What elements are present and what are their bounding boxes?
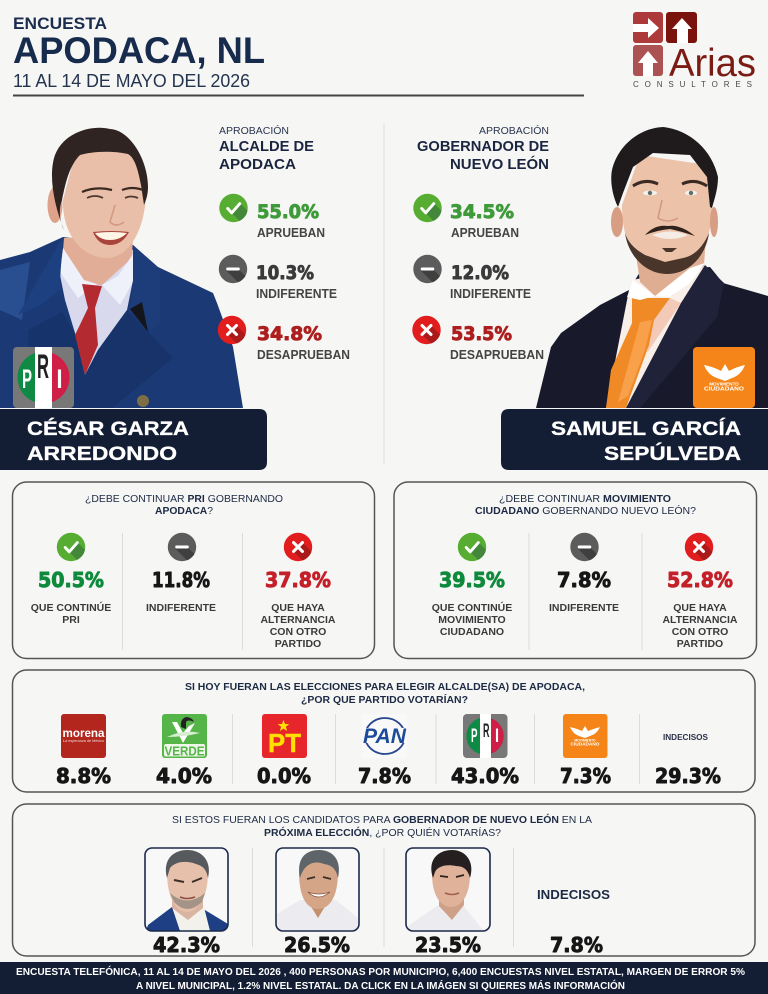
stat: indiferente alcalde xyxy=(219,255,337,301)
divider xyxy=(383,124,385,464)
option: alternancia MC: 52.8% xyxy=(667,568,733,592)
panel: intención de voto gobernador xyxy=(12,804,755,957)
heading: aprobación alcalde xyxy=(219,124,314,173)
stat: aprueban gobernador xyxy=(413,194,519,240)
name box: César Garza Arredondo: CÉSAR GARZA xyxy=(27,417,189,440)
indecisos: INDECISOS xyxy=(537,887,610,902)
party: indecisos: INDECISOS xyxy=(663,733,709,742)
party: PRI: I xyxy=(495,726,499,747)
heading: aprobación gobernador: NUEVO LEÓN xyxy=(450,155,549,173)
party: Morena: 8.8% xyxy=(56,764,111,788)
stat: desaprueban alcalde: DESAPRUEBAN xyxy=(257,348,350,362)
option: que continúe MC xyxy=(432,533,512,638)
panel: intención de voto gobernador: PRÓXIMA ELECCIÓN, ¿POR QUIÉN VOTARÍAS? xyxy=(264,826,501,839)
panel: continuar Movimiento Ciudadano: CIUDADANO GOBERNANDO NUEVO LEÓN? xyxy=(475,504,696,517)
option: alternancia PRI: PARTIDO xyxy=(275,638,321,650)
name box: César Garza Arredondo xyxy=(0,409,267,470)
name box: César Garza Arredondo: ARREDONDO xyxy=(27,443,177,465)
question: alcaldía: SI HOY FUERAN LAS ELECCIONES PARA ELEGIR ALCALDE(SA) DE APODACA, xyxy=(185,681,585,693)
stat: aprueban gobernador: APRUEBAN xyxy=(451,226,519,240)
stat: indiferente alcalde: INDIFERENTE xyxy=(256,287,337,301)
party: PT xyxy=(257,714,311,788)
stat: indiferente gobernador xyxy=(413,255,531,301)
party: Movimiento Ciudadano: 7.3% xyxy=(560,764,611,788)
option: alternancia MC: PARTIDO xyxy=(677,638,723,650)
party: Movimiento Ciudadano: MOVIMIENTO xyxy=(574,738,596,742)
heading: aprobación gobernador: APROBACIÓN xyxy=(479,124,549,137)
heading: aprobación gobernador: GOBERNADOR DE xyxy=(417,138,549,155)
candidate 1 xyxy=(145,848,228,957)
question: gobernador: SI ESTOS FUERAN LOS CANDIDATOS PARA GOBERNADOR DE NUEVO LEÓN EN LA xyxy=(172,813,592,826)
party: PAN: 7.8% xyxy=(358,764,411,788)
option: que continúe MC: QUE CONTINÚE xyxy=(432,601,512,614)
stat: desaprueban gobernador: 53.5% xyxy=(451,323,512,345)
party: PRI: P xyxy=(471,726,478,747)
logo: Arias Consultores xyxy=(633,12,756,89)
candidate 1: 42.3% xyxy=(153,933,220,957)
panel: continuar Movimiento Ciudadano xyxy=(394,482,756,658)
option: alternancia PRI: 37.8% xyxy=(265,568,331,592)
heading: aprobación alcalde: APODACA xyxy=(219,156,296,173)
stat: aprueban alcalde: APRUEBAN xyxy=(257,226,325,240)
indecisos: 7.8% xyxy=(550,933,603,957)
party: Movimiento Ciudadano xyxy=(560,714,611,788)
footer bar xyxy=(0,962,768,994)
party: Verde xyxy=(156,714,212,788)
logo: Movimiento Ciudadano badge: CIUDADANO xyxy=(704,386,745,392)
logo: PRI badge xyxy=(13,347,74,408)
option: alternancia MC: CON OTRO xyxy=(672,626,728,638)
party: PRI xyxy=(451,714,519,788)
party: PRI: 43.0% xyxy=(451,764,519,788)
party: PRI: R xyxy=(483,721,490,742)
portrait: Samuel García xyxy=(536,127,768,408)
option: que continúe PRI: PRI xyxy=(62,614,80,626)
panel: continuar PRI: APODACA? xyxy=(155,505,213,517)
party: PT: PT xyxy=(268,728,301,758)
stat: indiferente alcalde: 10.3% xyxy=(256,262,314,284)
portrait: César Garza xyxy=(0,128,243,408)
candidate 3: 23.5% xyxy=(415,933,481,957)
option: alternancia MC: ALTERNANCIA xyxy=(662,614,738,626)
logo: PRI badge: I xyxy=(56,364,62,394)
party: PAN xyxy=(358,714,411,788)
panel: intención de voto alcaldía: ¿POR QUE PARTIDO VOTARÍAN? xyxy=(301,693,468,706)
panel: continuar PRI xyxy=(12,482,374,658)
footer bar: A NIVEL MUNICIPAL, 1.2% NIVEL ESTATAL. DA CLICK EN LA IMÁGEN SI QUIERES MÁS INFORMACIÓN xyxy=(136,979,625,992)
indecisos xyxy=(537,887,610,957)
party: Morena xyxy=(56,714,111,788)
stat: aprueban alcalde xyxy=(219,194,325,240)
stat: desaprueban gobernador xyxy=(412,316,544,362)
option: indiferente MC: 7.8% xyxy=(557,568,611,592)
logo: Arias Consultores: Arias xyxy=(669,42,756,85)
name box: Samuel García Sepúlveda: SAMUEL GARCÍA xyxy=(551,417,741,440)
option: que continúe PRI: 50.5% xyxy=(38,568,104,592)
option: alternancia MC xyxy=(662,533,738,650)
stat: desaprueban gobernador: DESAPRUEBAN xyxy=(450,348,544,362)
logo: PRI badge: P xyxy=(22,364,32,394)
footer bar: ENCUESTA TELEFÓNICA, 11 AL 14 DE MAYO DEL 2026 , 400 PERSONAS POR MUNICIPIO, 6,400 ENCUESTAS NIVEL ESTATAL, MARGEN DE ERROR 5% xyxy=(16,965,745,978)
heading block: APODACA, NL xyxy=(13,29,265,71)
party: PAN: PAN xyxy=(363,725,407,748)
party: indecisos xyxy=(655,733,721,788)
name box: Samuel García Sepúlveda: SEPÚLVEDA xyxy=(604,441,741,465)
option: indiferente PRI: 11.8% xyxy=(152,568,210,592)
heading block: ENCUESTA xyxy=(13,14,107,33)
party: Morena: morena xyxy=(62,728,105,740)
party: indecisos: 29.3% xyxy=(655,764,721,788)
party: Verde: 4.0% xyxy=(156,764,212,788)
candidate 3 xyxy=(406,848,490,957)
option: indiferente PRI xyxy=(146,533,216,614)
option: que continúe PRI: QUE CONTINÚE xyxy=(31,601,111,614)
option: indiferente MC xyxy=(549,533,619,614)
option: que continúe MC: MOVIMIENTO xyxy=(438,614,506,626)
name box: Samuel García Sepúlveda xyxy=(501,409,768,470)
question: PRI: ¿DEBE CONTINUAR PRI GOBERNANDO xyxy=(85,493,283,505)
party: PT: 0.0% xyxy=(257,764,311,788)
heading block: 11 AL 14 DE MAYO DEL 2026 xyxy=(13,71,250,91)
candidate 2: 26.5% xyxy=(284,933,350,957)
panel: intención de voto alcaldía xyxy=(12,670,755,792)
party: Verde: VERDE xyxy=(164,744,205,758)
option: que continúe MC: CIUDADANO xyxy=(440,626,504,638)
stat: desaprueban alcalde: 34.8% xyxy=(257,323,322,345)
option: que continúe MC: 39.5% xyxy=(439,568,505,592)
heading block xyxy=(13,14,265,91)
option: alternancia PRI: ALTERNANCIA xyxy=(260,614,336,626)
option: que continúe PRI xyxy=(31,533,111,626)
logo: Arias Consultores: CONSULTORES xyxy=(633,80,752,89)
option: indiferente PRI: INDIFERENTE xyxy=(146,602,216,614)
question: Movimiento Ciudadano: ¿DEBE CONTINUAR MOVIMIENTO xyxy=(499,493,671,505)
logo: Movimiento Ciudadano badge: MOVIMIENTO xyxy=(709,382,739,386)
option: alternancia PRI xyxy=(260,533,336,650)
stat: aprueban gobernador: 34.5% xyxy=(450,201,514,223)
option: indiferente MC: INDIFERENTE xyxy=(549,602,619,614)
logo: Movimiento Ciudadano badge xyxy=(693,347,755,408)
option: alternancia PRI: QUE HAYA xyxy=(271,602,325,614)
stat: indiferente gobernador: INDIFERENTE xyxy=(450,287,531,301)
logo: PRI badge: R xyxy=(37,348,49,386)
party: Movimiento Ciudadano: CIUDADANO xyxy=(570,742,600,746)
stat: indiferente gobernador: 12.0% xyxy=(451,262,509,284)
heading: aprobación alcalde: ALCALDE DE xyxy=(219,138,314,155)
heading: aprobación alcalde: APROBACIÓN xyxy=(219,124,289,137)
stat: desaprueban alcalde xyxy=(218,316,350,362)
party: Morena: La esperanza de México xyxy=(63,739,104,743)
stat: aprueban alcalde: 55.0% xyxy=(257,201,319,223)
option: alternancia MC: QUE HAYA xyxy=(673,602,727,614)
candidate 2 xyxy=(276,848,359,957)
option: alternancia PRI: CON OTRO xyxy=(270,626,326,638)
heading: aprobación gobernador xyxy=(417,124,549,173)
